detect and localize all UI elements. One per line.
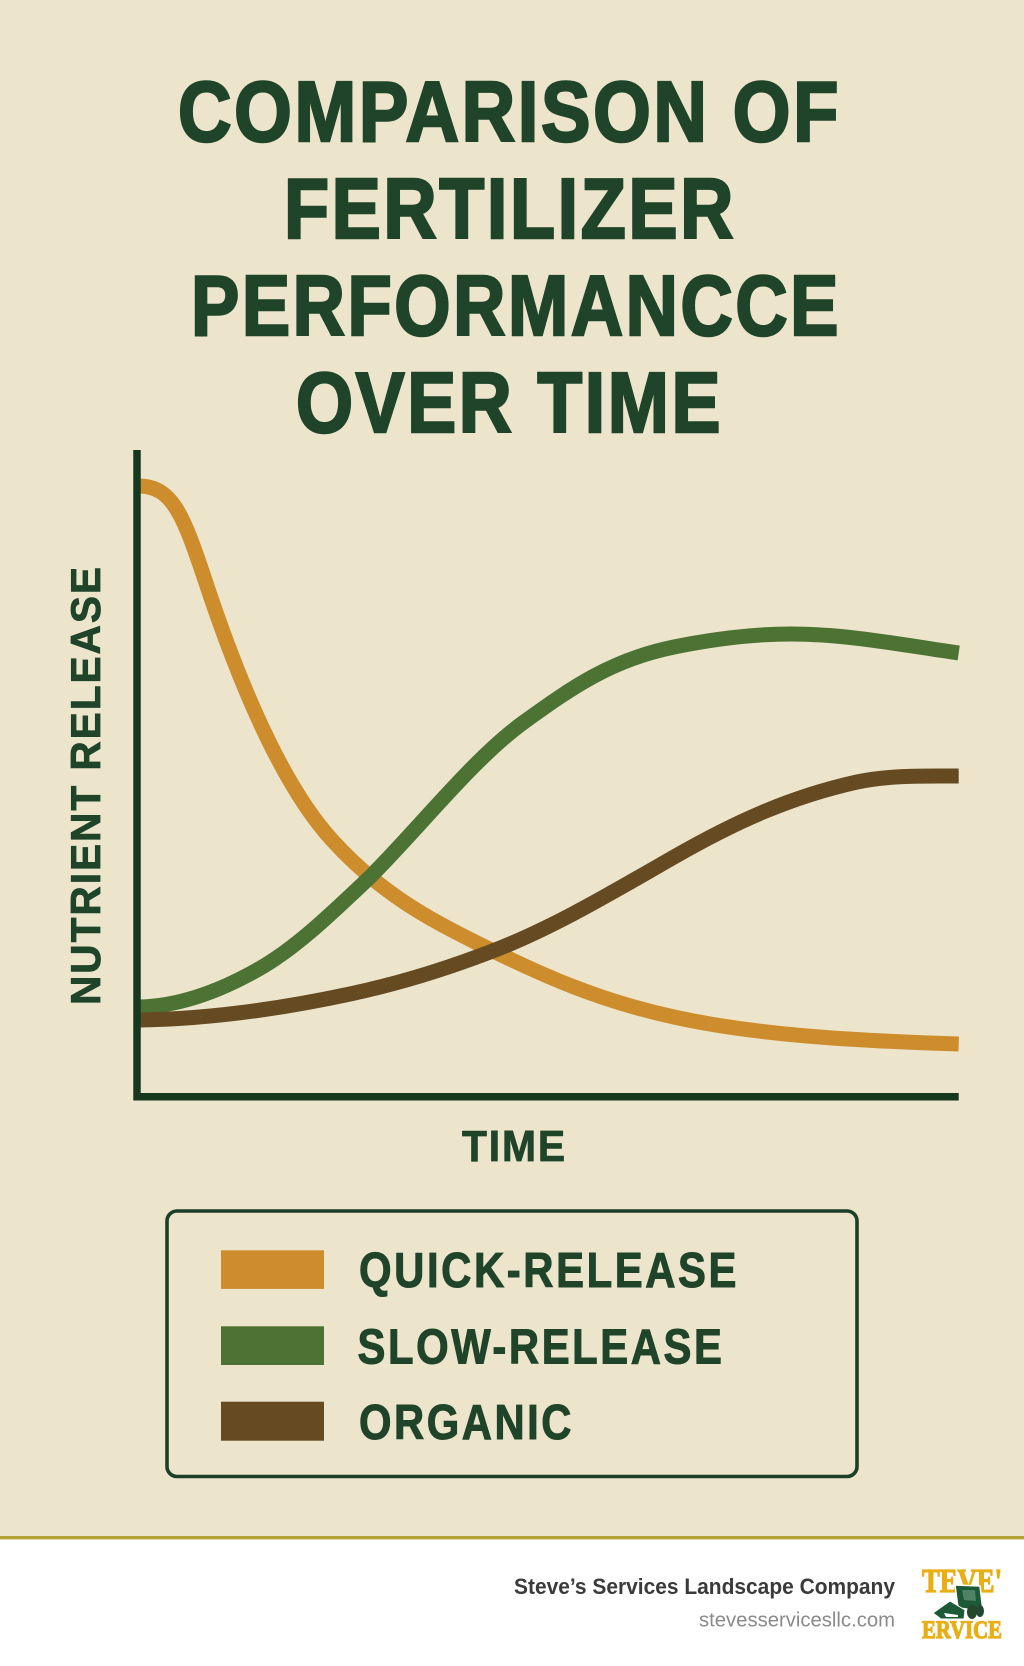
- legend item: slow-release: [221, 1320, 724, 1374]
- icon: company logo with skid-steer loader: [922, 1563, 1002, 1644]
- title: COMPARISON OF: [178, 65, 841, 160]
- icon: company logo with skid-steer loader: ERVICE: [922, 1617, 1002, 1644]
- title: PERFORMANCCE: [191, 259, 841, 354]
- legend item: quick-release: [221, 1244, 739, 1298]
- y-axis label: NUTRIENT RELEASE: [62, 565, 109, 1005]
- legend item: slow-release: SLOW-RELEASE: [358, 1320, 724, 1374]
- footer: [0, 1536, 1024, 1666]
- x-axis label: TIME: [462, 1122, 567, 1171]
- title: [178, 65, 841, 451]
- legend item: organic: ORGANIC: [359, 1396, 574, 1450]
- title: FERTILIZER: [284, 162, 736, 257]
- website: stevesservicesllc.com: [699, 1610, 895, 1632]
- axes: [137, 450, 959, 1097]
- line chart: nutrient release over time: [62, 450, 959, 1171]
- curve: organic: [140, 776, 959, 1020]
- title: OVER TIME: [296, 356, 723, 451]
- legend item: quick-release: QUICK-RELEASE: [359, 1244, 739, 1298]
- icon: company logo with skid-steer loader: TEVE': [922, 1563, 1002, 1600]
- curve: slow-release: [140, 634, 959, 1007]
- legend: [167, 1211, 857, 1476]
- legend item: organic: [221, 1396, 574, 1450]
- legend frame: [167, 1211, 857, 1476]
- curve: quick-release: [140, 486, 959, 1044]
- company name: Steve’s Services Landscape Company: [514, 1574, 896, 1599]
